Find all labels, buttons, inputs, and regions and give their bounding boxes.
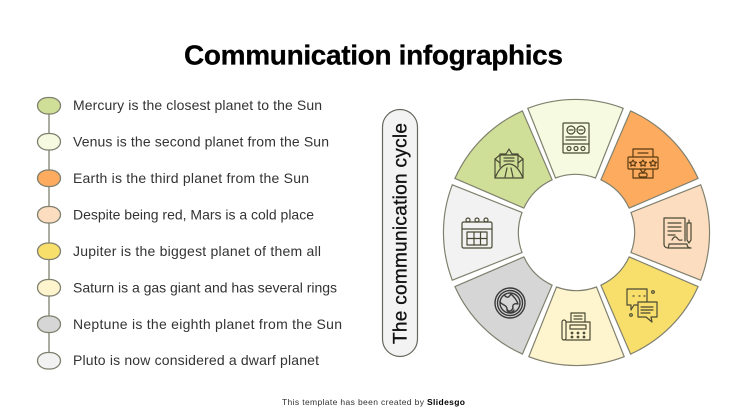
legend item: Pluto: Pluto is now considered a dwarf planet (73, 352, 319, 368)
segment: peach (631, 185, 710, 280)
footer credit: This template has been created by Slidesgo (282, 397, 465, 407)
legend item: Saturn: Saturn is a gas giant and has several rings (73, 280, 337, 296)
segment: top (528, 99, 623, 178)
segment: light gray (443, 185, 522, 280)
communication cycle donut (443, 99, 710, 366)
legend item: Mercury: Mercury is the closest planet to the Sun (73, 97, 322, 113)
vertical label pill (382, 110, 418, 356)
segment: gray (449, 237, 572, 360)
icon: fax machine (562, 313, 590, 340)
vertical label pill: The communication cycle (390, 123, 412, 344)
segment: green (449, 105, 572, 228)
icon: survey panel (563, 123, 589, 153)
icon: calendar (462, 218, 492, 248)
segment: light yellow (529, 287, 624, 366)
title: Communication infographics (184, 40, 563, 70)
legend item: Mars: Despite being red, Mars is a cold place (73, 206, 314, 222)
legend item: Earth: Earth is the third planet from the Sun (73, 170, 309, 186)
segment: orange (581, 105, 704, 228)
icon: envelope (495, 149, 523, 178)
legend item: Jupiter: Jupiter is the biggest planet of them all (73, 243, 321, 259)
segment: yellow (581, 237, 704, 360)
legend item: Venus: Venus is the second planet from the Sun (73, 134, 329, 150)
legend list (38, 97, 342, 369)
icon: contract and pen (664, 218, 691, 248)
legend item: Neptune: Neptune is the eighth planet from the Sun (73, 316, 342, 332)
icon: globe (495, 288, 525, 318)
icon: star rating (628, 149, 658, 178)
icon: chat bubbles (627, 289, 657, 322)
